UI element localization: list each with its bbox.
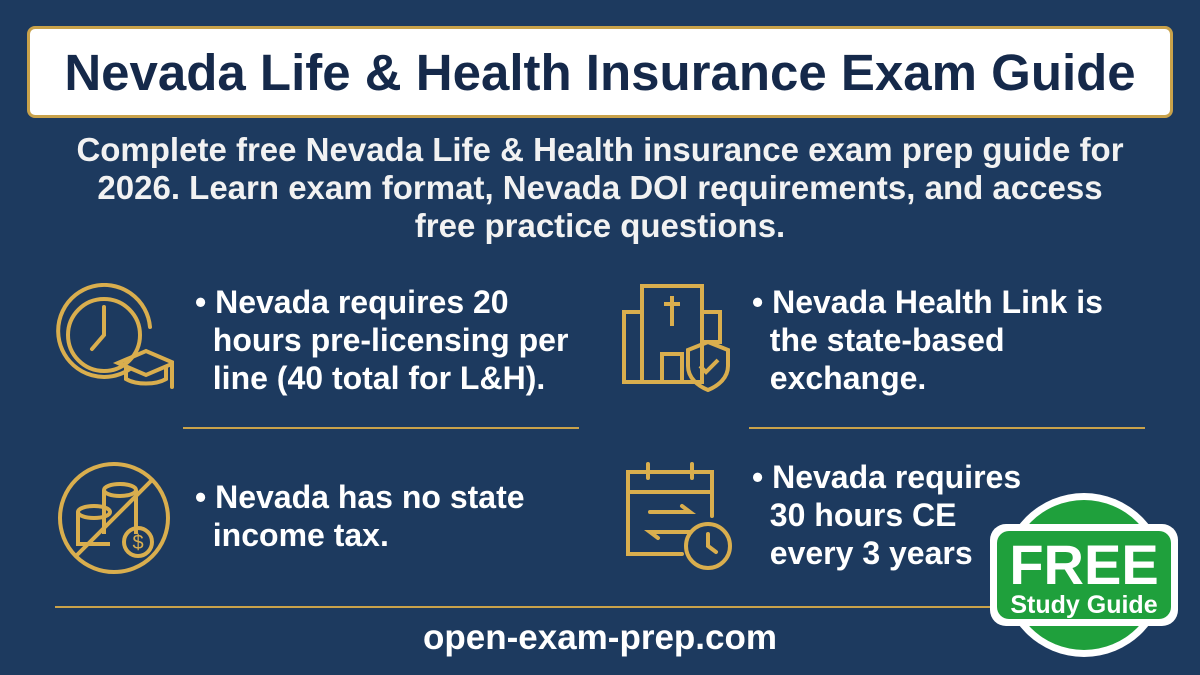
text: CE bbox=[752, 459, 1021, 571]
text: pre-licensing bbox=[195, 284, 568, 396]
bottom divider bbox=[55, 606, 995, 608]
divider left bbox=[183, 427, 579, 429]
text: pre-licensing: • Nevada requires 20 bbox=[195, 284, 509, 320]
footer url: open-exam-prep.com bbox=[423, 618, 777, 657]
title: Nevada Life & Health Insurance Exam Guide bbox=[64, 44, 1136, 100]
divider right bbox=[749, 427, 1145, 429]
badge: free study guide: Study Guide bbox=[1010, 591, 1158, 619]
icon: hospital with shield bbox=[622, 284, 730, 392]
text: CE: every 3 years bbox=[770, 535, 973, 571]
text: health link: exchange. bbox=[770, 360, 926, 396]
text: health link: the state-based bbox=[770, 322, 1005, 358]
text: no income tax: • Nevada has no state bbox=[195, 479, 525, 515]
icon: calendar with clock bbox=[626, 462, 732, 570]
text: pre-licensing: line (40 total for L&H). bbox=[213, 360, 545, 396]
badge: free study guide: FREE bbox=[1009, 533, 1159, 596]
text: no income tax bbox=[195, 479, 525, 553]
text: health link: • Nevada Health Link is bbox=[752, 284, 1103, 320]
icon: no coins: $ bbox=[132, 532, 144, 554]
text: health link bbox=[752, 284, 1103, 396]
text: CE: 30 hours CE bbox=[770, 497, 956, 533]
icon: no coins bbox=[58, 462, 170, 574]
text: no income tax: income tax. bbox=[213, 517, 389, 553]
badge: free study guide bbox=[990, 493, 1178, 657]
text: CE: • Nevada requires bbox=[752, 459, 1021, 495]
icon: clock with graduation cap bbox=[56, 283, 174, 389]
text: pre-licensing: hours pre-licensing per bbox=[213, 322, 568, 358]
title bbox=[27, 26, 1173, 118]
subtitle: Complete free Nevada Life & Health insurance exam prep guide for 2026. Learn exam format, Nevada DOI requirements, and access free practice questions. bbox=[76, 131, 1124, 244]
